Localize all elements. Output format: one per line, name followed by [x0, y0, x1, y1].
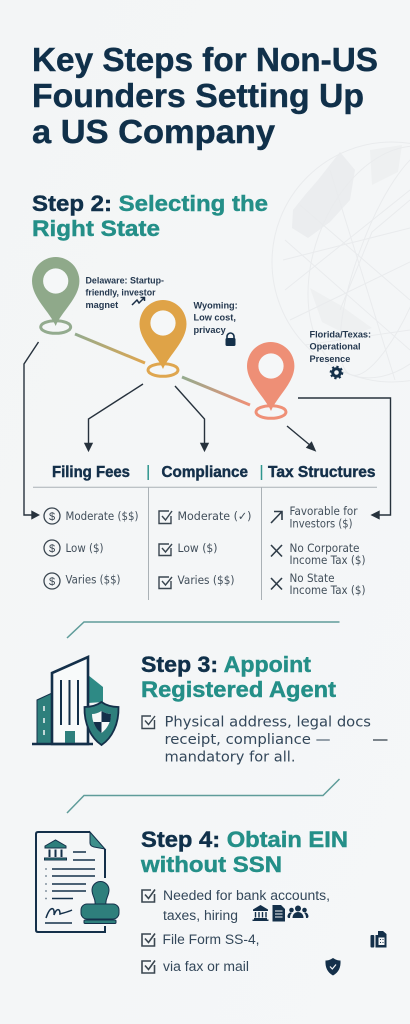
arrow: to Filing Fees: [85, 384, 143, 450]
column: filing fees: $: [49, 576, 55, 588]
label: Florida/Texas: Florida/Texas:: [310, 330, 371, 340]
label: Florida/Texas: [310, 330, 371, 378]
pin: Wyoming: [140, 300, 186, 376]
table headers: Compliance: [162, 464, 248, 481]
column: tax structures: [271, 504, 366, 597]
step 4 checklist: Needed for bank accounts,: [163, 888, 330, 903]
divider above step 3: [67, 622, 340, 638]
icon: people: [288, 906, 308, 918]
label: Florida/Texas: Operational: [310, 342, 361, 352]
step 4 checklist: [142, 888, 386, 976]
icon: fax machine: [370, 931, 386, 948]
step 4 checklist: via fax or mail: [163, 959, 249, 974]
table headers: [52, 464, 376, 481]
icon: bank: [252, 905, 268, 921]
step 2 heading: Right State: [32, 216, 160, 241]
icon: shield check: [325, 958, 341, 976]
icon: building with shield: [32, 657, 119, 745]
label: Wyoming: [194, 300, 238, 346]
title: a US Company: [32, 113, 276, 150]
title: Key Steps for Non-US: [32, 41, 378, 78]
column: compliance: Low ($): [178, 541, 218, 555]
step 4 checklist: File Form SS-4,: [162, 932, 260, 947]
column: compliance: Varies ($$): [178, 573, 234, 587]
label: Delaware: friendly, investor: [86, 288, 156, 298]
column: filing fees: $: [49, 543, 55, 555]
connector lines between pins: [75, 334, 250, 405]
label: Delaware: Delaware: Startup-: [86, 276, 164, 286]
stamp: [81, 882, 119, 924]
step 3 checklist: [142, 714, 388, 766]
column: tax structures: Favorable for: [290, 504, 358, 518]
label: Wyoming: Wyoming:: [194, 300, 238, 310]
step 2 heading: Step 2: Selecting the: [32, 191, 268, 216]
label: Delaware: magnet: [86, 300, 118, 310]
label: Delaware: [86, 276, 164, 310]
column: tax structures: Investors ($): [290, 516, 352, 530]
arrow: Florida/Texas to tax row: [298, 398, 390, 518]
step 4 heading: Step 4: Obtain EIN: [141, 827, 348, 852]
column: filing fees: Varies ($$): [66, 572, 120, 586]
arrow: to Tax Structures: [287, 426, 315, 450]
arrow: to Compliance: [175, 386, 208, 450]
step 3 heading: [141, 652, 337, 702]
column: compliance: Moderate (✓): [178, 509, 252, 523]
column: tax structures: Income Tax ($): [290, 553, 366, 567]
icon: tax form: [272, 905, 285, 922]
step 4 heading: without SSN: [140, 852, 282, 877]
icon: document with stamp: [36, 832, 119, 932]
comparison table: [33, 464, 377, 600]
label: Florida/Texas: Presence: [310, 354, 350, 364]
divider below step 3: [67, 779, 340, 813]
column: tax structures: No State: [290, 571, 334, 585]
column: filing fees: $: [49, 511, 55, 523]
title: [32, 41, 378, 150]
column: compliance: [159, 509, 252, 588]
step 2 heading: [32, 191, 268, 241]
step 3 heading: Registered Agent: [141, 677, 337, 702]
arrow: Delaware to filing fees row: [24, 342, 38, 518]
pin: Delaware: [32, 257, 79, 333]
table headers: Filing Fees: [52, 464, 130, 481]
column: filing fees: Moderate ($$): [66, 509, 138, 523]
column: filing fees: Low ($): [66, 541, 104, 555]
column: filing fees: [44, 508, 138, 589]
step 3 checklist: Physical address, legal docs: [164, 714, 371, 730]
label: Wyoming: Low cost,: [194, 312, 236, 322]
column: tax structures: No Corporate: [290, 541, 360, 555]
step 4 checklist: taxes, hiring: [163, 908, 238, 923]
label: Wyoming: privacy: [194, 325, 227, 335]
step 4 heading: [140, 827, 348, 877]
background globe: [272, 123, 410, 401]
table headers: Tax Structures: [268, 464, 376, 481]
column: tax structures: Income Tax ($): [290, 583, 366, 597]
pin: Florida/Texas: [247, 342, 294, 418]
title: Founders Setting Up: [32, 77, 364, 114]
step 3 checklist: receipt, compliance —: [164, 732, 330, 748]
step 3 heading: Step 3: Appoint: [141, 652, 312, 677]
step 3 checklist: mandatory for all.: [164, 750, 296, 766]
